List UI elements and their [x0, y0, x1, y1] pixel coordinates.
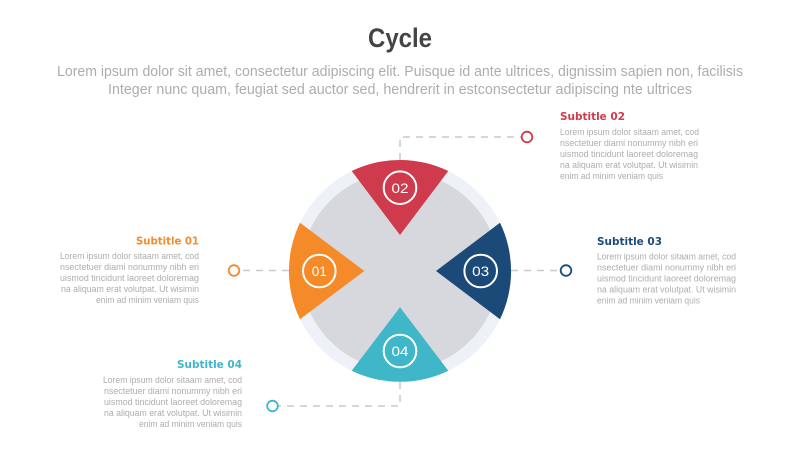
text block: subtitle 01: nsectetuer diami nonummy nibh eri [60, 262, 199, 272]
text block: subtitle 02: Subtitle 02 [560, 110, 625, 123]
text block: subtitle 02: enim ad minim veniam quis [560, 171, 664, 181]
text block: subtitle 01 [60, 234, 200, 305]
text block: subtitle 03: uismod tincidunt laoreet doloremag [597, 274, 736, 284]
text block: subtitle 01: Lorem ipsum dolor sitaam amet, cod [60, 251, 199, 261]
text block: subtitle 02: na aliquam erat volutpat. Ut wisimin [560, 160, 698, 170]
text block: subtitle 01: Subtitle 01 [136, 234, 199, 248]
title: Cycle [368, 23, 432, 53]
connector: step 02 [400, 132, 532, 160]
text block: subtitle 04: uismod tincidunt laoreet doloremag [104, 397, 242, 407]
wedge 02 [352, 160, 448, 235]
connector: step 04 [267, 382, 400, 411]
text block: subtitle 03: Subtitle 03 [597, 235, 662, 248]
text block: subtitle 01: na aliquam erat volutpat. Ut wisimin [61, 284, 199, 294]
text block: subtitle 04: Lorem ipsum dolor sitaam amet, cod [103, 375, 242, 385]
text block: subtitle 04: enim ad minim veniam quis [139, 419, 243, 429]
outer ring [289, 160, 511, 382]
text block: subtitle 02: uismod tincidunt laoreet doloremag [560, 149, 698, 159]
wedge 03: 03 [472, 263, 489, 279]
text block: subtitle 03 [597, 235, 736, 306]
text block: subtitle 04 [103, 358, 243, 429]
text block: subtitle 03: Lorem ipsum dolor sitaam amet, cod [597, 252, 736, 262]
connector: step 01 [229, 265, 289, 276]
text block: subtitle 04: Subtitle 04 [177, 358, 242, 371]
text block: subtitle 03: enim ad minim veniam quis [597, 296, 701, 306]
connector: step 03 [511, 265, 571, 276]
cycle diagram [289, 160, 511, 382]
intro text block: Integer nunc quam, feugiat sed auctor sed, hendrerit in estconsectetur adipiscing nte ultrices [108, 81, 692, 98]
text block: subtitle 03: na aliquam erat volutpat. Ut wisimin [597, 284, 736, 294]
wedge 01 [289, 223, 364, 319]
inner disc [301, 172, 499, 370]
wedge 04: 04 [392, 343, 409, 359]
wedge 03 [436, 223, 511, 319]
text block: subtitle 04: nsectetuer diami nonummy nibh eri [104, 386, 242, 396]
intro text block [57, 63, 743, 98]
text block: subtitle 01: uismod tincidunt laoreet doloremag [60, 273, 199, 283]
text block: subtitle 02: Lorem ipsum dolor sitaam amet, cod [560, 127, 699, 137]
text block: subtitle 02 [560, 110, 699, 181]
text block: subtitle 04: na aliquam erat volutpat. Ut wisimin [104, 408, 242, 418]
wedge 01: 01 [312, 263, 327, 279]
text block: subtitle 01: enim ad minim veniam quis [96, 295, 200, 305]
wedge 02: 02 [392, 180, 409, 196]
text block: subtitle 02: nsectetuer diami nonummy nibh eri [560, 138, 698, 148]
intro text block: Lorem ipsum dolor sit amet, consectetur adipiscing elit. Puisque id ante ultrices, dignissim sapien non, facilisis [57, 63, 743, 80]
wedge 04 [352, 307, 448, 382]
text block: subtitle 03: nsectetuer diami nonummy nibh eri [597, 262, 736, 272]
